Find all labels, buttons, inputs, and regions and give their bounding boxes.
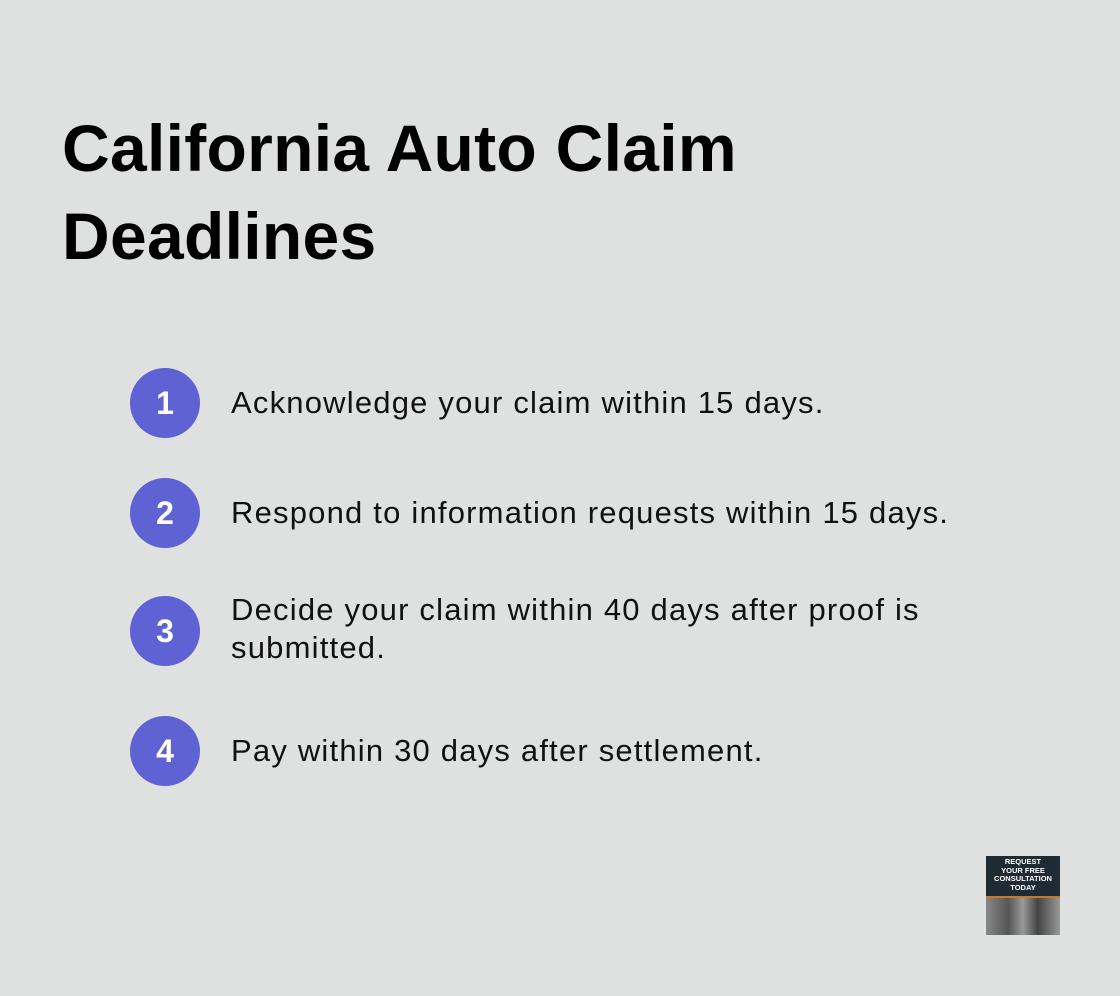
logo: consultation badge: REQUEST	[1005, 857, 1041, 866]
step 2	[130, 478, 949, 548]
title: Deadlines	[62, 199, 376, 273]
circle 1: 1	[156, 385, 174, 421]
text 1: Acknowledge your claim within 15 days.	[231, 385, 825, 420]
circle 4: 4	[156, 733, 174, 769]
logo: consultation badge: CONSULTATION	[994, 874, 1052, 883]
step 4	[130, 716, 764, 786]
circle 3	[130, 596, 200, 666]
circle 2: 2	[156, 495, 174, 531]
text 3: Decide your claim within 40 days after proof is submitted.	[231, 592, 920, 665]
circle 4	[130, 716, 200, 786]
circle 1	[130, 368, 200, 438]
circle 3: 3	[156, 613, 174, 649]
logo: consultation badge: TODAY	[1010, 882, 1036, 892]
title	[62, 111, 737, 273]
text 4: Pay within 30 days after settlement.	[231, 733, 764, 768]
logo: consultation badge	[986, 856, 1060, 935]
title: California Auto Claim	[62, 111, 737, 185]
step 1	[130, 368, 825, 438]
logo: consultation badge: YOUR FREE	[1001, 866, 1045, 874]
circle 2	[130, 478, 200, 548]
step 3	[130, 592, 920, 666]
text 2: Respond to information requests within 15 days.	[231, 495, 949, 530]
